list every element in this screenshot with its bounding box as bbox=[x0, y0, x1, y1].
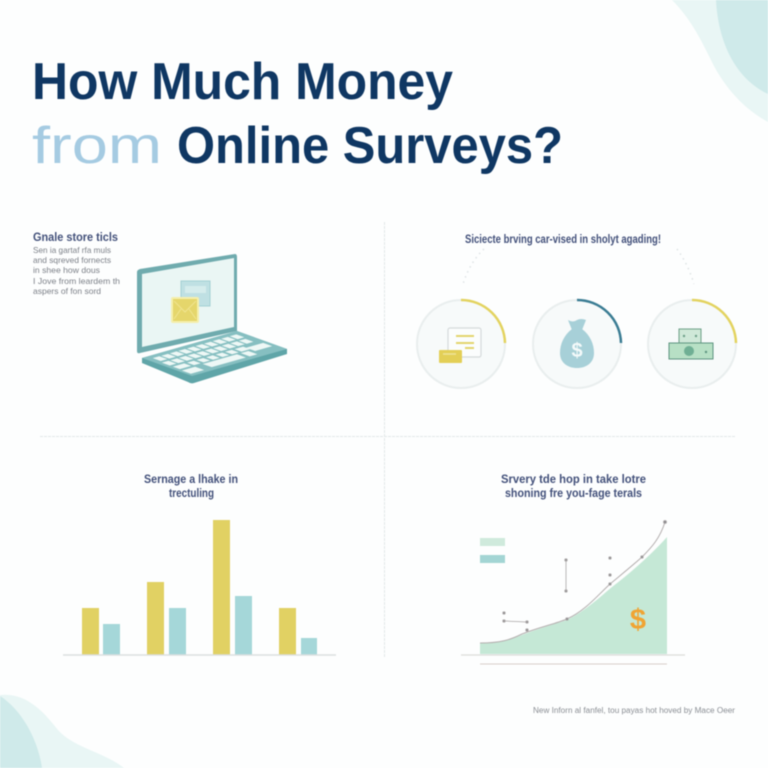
footer note: New Inforn al fanfel, tou payas hot hoved by Mace Oeer bbox=[533, 706, 735, 715]
panel: growth area chart bbox=[461, 474, 685, 664]
legend swatches bbox=[480, 538, 505, 546]
heading: bar chart bbox=[144, 474, 238, 500]
ring 2: money bag icon: $ bbox=[571, 340, 583, 362]
panel: intro text: Sen ia gartaf rfa muls bbox=[33, 245, 111, 255]
decorative wave: top right bbox=[672, 0, 768, 122]
title bbox=[32, 53, 563, 175]
bars bbox=[82, 520, 317, 655]
data markers bbox=[503, 520, 666, 631]
keyboard keys bbox=[150, 334, 279, 374]
icon: envelope on screen bbox=[172, 298, 198, 322]
title: from bbox=[32, 117, 162, 175]
trend line bbox=[480, 522, 665, 643]
laptop keyboard deck bbox=[142, 331, 287, 376]
heading: growth chart: shoning fre you-fage terals bbox=[505, 488, 642, 500]
panel: intro text: I Jove from leardem th bbox=[33, 276, 120, 286]
heading: growth chart: Srvery tde hop in take lotre bbox=[501, 474, 646, 486]
icon: document on screen bbox=[181, 281, 210, 306]
panel: intro text: in shee how dous bbox=[33, 265, 100, 275]
panel: three survey rings bbox=[417, 234, 736, 388]
heading: growth chart bbox=[501, 474, 646, 500]
heading: bar chart: trectuling bbox=[169, 488, 214, 500]
ring 2: money bag icon bbox=[533, 300, 621, 388]
panel: intro text bbox=[33, 232, 120, 296]
laptop screen frame bbox=[137, 254, 237, 353]
title: Online Surveys? bbox=[177, 117, 563, 175]
ring 3: banknotes icon bbox=[648, 300, 736, 388]
dotted connector left bbox=[463, 249, 484, 284]
laptop base side bbox=[142, 331, 287, 383]
title: How Much Money bbox=[32, 53, 453, 111]
panel: intro text: and sqreved fornects bbox=[33, 255, 111, 265]
ring 1: message icon bbox=[417, 300, 505, 388]
icon: dollar sign: $ bbox=[630, 604, 646, 636]
panel: intro text: aspers of fon sord bbox=[33, 286, 101, 296]
panel: intro text: Gnale store ticls bbox=[33, 232, 118, 244]
dotted connector right bbox=[677, 249, 694, 284]
heading: rings: Siciecte brving car-vised in sholyt agading! bbox=[465, 234, 661, 246]
axis bbox=[461, 654, 685, 656]
panel: bar chart bbox=[63, 474, 336, 655]
decorative wave: bottom left bbox=[0, 695, 124, 768]
icon: laptop bbox=[137, 254, 287, 383]
heading: bar chart: Sernage a lhake in bbox=[144, 474, 238, 486]
area bbox=[480, 537, 667, 654]
quadrant dividers bbox=[40, 222, 735, 658]
